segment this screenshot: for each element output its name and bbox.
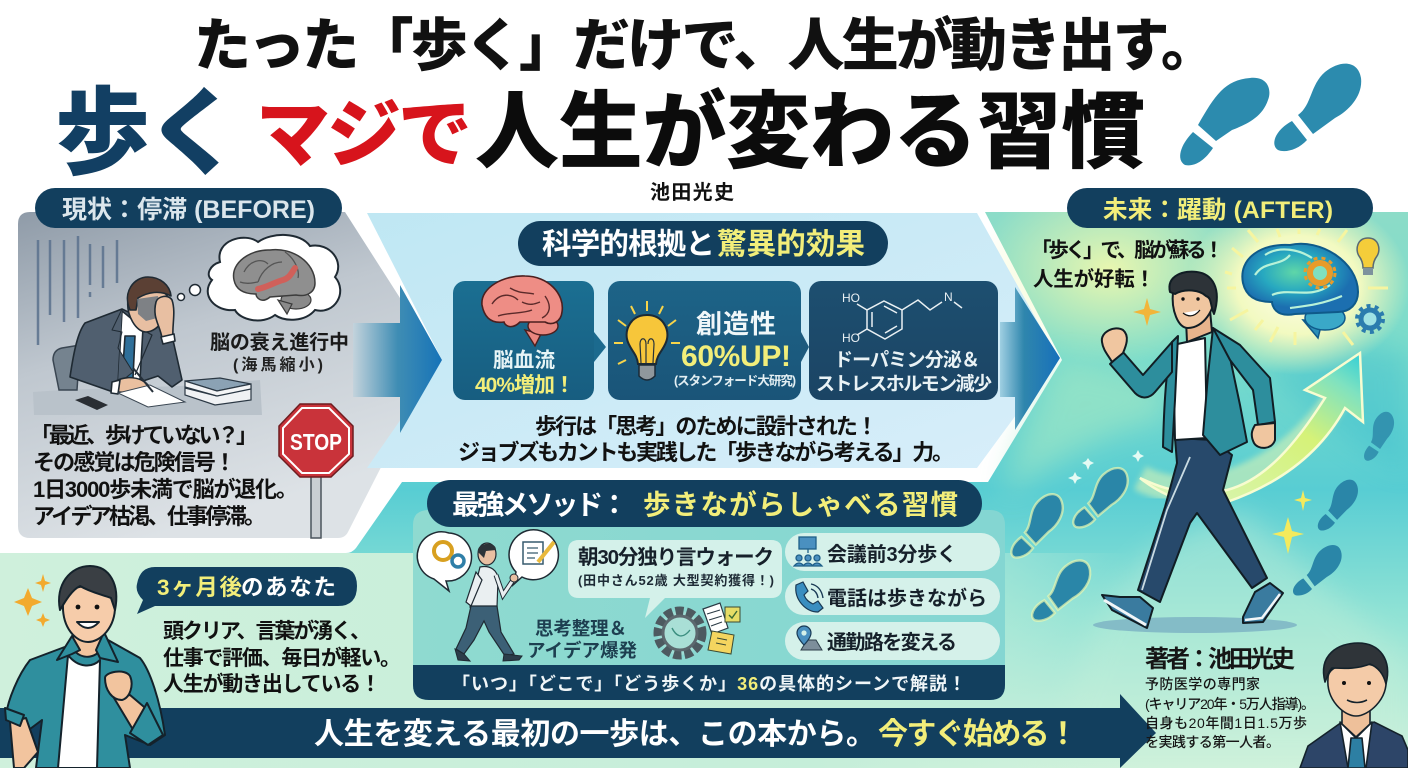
icon: dopamine molecule: HO (842, 331, 860, 345)
raised fist (105, 672, 132, 700)
icon: gray brain with highlighted hippocampus (234, 250, 315, 314)
card: blood flow: 脳血流 (493, 349, 556, 372)
paper (118, 385, 185, 407)
after text block: 「歩く」で、脳が蘇る！ (1031, 238, 1224, 262)
text block: three months later: 頭クリア、言葉が湧く、 (163, 619, 371, 643)
shadow under walker (1093, 617, 1297, 633)
science text block: 歩行は「思考」のために設計された！ (535, 414, 878, 439)
thought bubble (178, 235, 340, 320)
card: dopamine (809, 281, 998, 400)
text: idea explosion: 思考整理＆ (535, 618, 627, 639)
figure: three months later man (5, 566, 165, 768)
text: idea explosion (527, 618, 637, 661)
author block: を実践する第一人者。 (1145, 734, 1280, 750)
callout: morning walk (568, 540, 782, 618)
author block (1145, 646, 1315, 750)
card: dopamine: ドーパミン分泌＆ (834, 349, 980, 371)
before text block (30, 423, 298, 529)
heading: science: 科学的根拠と (542, 228, 715, 261)
card: dopamine: ストレスホルモン減少 (816, 372, 992, 395)
panel: method (413, 510, 1005, 700)
jacket left panel (1163, 336, 1178, 452)
icon: footprints top right (1180, 64, 1361, 165)
heading: method: 歩きながらしゃべる習慣 (643, 489, 958, 520)
icon: gear and documents (658, 603, 740, 655)
card: blood flow (453, 276, 606, 400)
sparkles: orange (14, 574, 51, 627)
callout: 3 months later: 3ヶ月後 (157, 575, 242, 600)
science text block (458, 414, 954, 465)
panel: after background (346, 212, 1408, 768)
icon: glowing brain (1225, 229, 1388, 345)
sparkles: after (1068, 298, 1312, 554)
arm right (1213, 328, 1275, 425)
panel: method: 「いつ」「どこで」「どう歩くか」36の具体的シーンで解説！ (452, 674, 966, 694)
panel: lower left background (0, 553, 1130, 768)
shoes (1102, 595, 1153, 628)
before text block: 「最近、歩けていない？」 (30, 423, 258, 448)
icon: light bulb (614, 301, 680, 380)
figure: author portrait (1300, 643, 1408, 768)
heading: method (427, 480, 982, 527)
heading: method: 最強メソッド： (452, 489, 628, 520)
arrow: science to after (1000, 287, 1060, 430)
science text block: ジョブズもカントも実践した「歩きながら考える」力。 (458, 440, 954, 465)
text block: three months later (163, 619, 401, 696)
label: after pill: 未来：躍動 (AFTER) (1103, 196, 1333, 224)
panel: science chevron (367, 213, 1058, 468)
before text block: 1日3000歩未満で脳が退化。 (33, 477, 298, 502)
text: idea explosion: アイデア爆発 (527, 640, 637, 661)
author block: 著者：池田光史 (1145, 646, 1295, 673)
text block: three months later: 人生が動き出している！ (163, 672, 381, 696)
callout: morning walk: (田中さん52歳 大型契約獲得！) (578, 573, 774, 588)
icon: blue gear (1357, 306, 1383, 332)
callout: morning walk: 朝30分独り言ウォーク (578, 546, 774, 569)
cta arrow: 今すぐ始める！ (878, 718, 1078, 751)
label: before pill: 現状：停滞 (BEFORE) (62, 196, 315, 224)
icon: stop sign (279, 404, 353, 538)
icon: walking person with bubbles (417, 530, 558, 661)
cta arrow (0, 694, 1156, 768)
icon: meeting (794, 537, 822, 566)
trousers (1138, 438, 1267, 602)
desk (33, 380, 262, 415)
title line 2: マジで (256, 93, 472, 176)
chair (53, 345, 80, 390)
phone (75, 396, 108, 410)
icon: map pin and road (797, 626, 822, 650)
title line 2 (55, 81, 1145, 187)
after text block (1031, 238, 1224, 291)
after text block: 人生が好転！ (1033, 267, 1155, 291)
icon: stop sign: STOP (290, 429, 342, 455)
author block: 予防医学の専門家 (1145, 676, 1260, 692)
text block: three months later: 仕事で評価、毎日が軽い。 (163, 646, 401, 670)
footprints: after panel (1005, 410, 1403, 621)
pill: change commute (785, 622, 1000, 660)
author name under title: 池田光史 (650, 181, 734, 204)
brain decline label: 脳の衰え進行中 (210, 331, 349, 354)
fist (1102, 328, 1127, 362)
pill: walk before meeting (785, 533, 1000, 571)
icon: small light bulb (1357, 238, 1379, 275)
jacket right panel (1203, 328, 1247, 455)
callout: 3 months later (137, 567, 357, 614)
pen (133, 368, 153, 392)
title line 2: 歩く (55, 81, 241, 187)
arrow: growth swoosh (1140, 353, 1363, 504)
rain lines (38, 236, 117, 345)
heading: science: 驚異的効果 (717, 228, 865, 261)
label: before pill (35, 188, 342, 228)
brain decline label: (海馬縮小) (233, 355, 323, 374)
author block: (キャリア20年・5万人指導)。 (1145, 696, 1315, 712)
panel: before (18, 212, 400, 538)
books (185, 378, 251, 405)
pill: change commute: 通勤路を変える (827, 631, 957, 654)
sleeve and forearm (114, 695, 150, 733)
pill: walk during phone (785, 578, 1000, 615)
card: creativity (608, 281, 809, 400)
icon: pink brain (482, 276, 562, 346)
icon: phone (796, 582, 823, 612)
depressed man (70, 277, 182, 394)
pill: walk before meeting: 会議前3分歩く (827, 543, 957, 566)
heading: science (518, 221, 888, 266)
title line 2: 人生が変わる習慣 (475, 85, 1145, 179)
before text block: アイデア枯渇、仕事停滞。 (33, 504, 266, 529)
figure: walking man (1102, 272, 1283, 628)
author block: 自身も20年間1日1.5万歩 (1145, 715, 1307, 731)
glow behind brain (1194, 220, 1406, 372)
label: after pill (1067, 188, 1373, 228)
left hand (10, 718, 38, 768)
head (1186, 310, 1212, 342)
arm left (1110, 342, 1172, 397)
card: creativity: 創造性 (696, 309, 776, 339)
arrow: before to science (353, 285, 442, 433)
callout: 3 months later: のあなた (241, 575, 336, 600)
card: blood flow: 40%増加！ (475, 374, 575, 397)
icon: dopamine molecule: HO (842, 291, 860, 305)
icon: dopamine molecule (842, 290, 962, 345)
card: creativity: 60%UP! (681, 340, 791, 373)
shirt (1173, 338, 1207, 440)
icon: dopamine molecule: N (944, 290, 953, 304)
brain decline label (210, 331, 349, 374)
pill: walk during phone: 電話は歩きながら (827, 586, 987, 610)
card: creativity: (スタンフォード大研究) (674, 373, 796, 388)
title line 1: たった「歩く」だけで、人生が動き出す。 (194, 14, 1218, 78)
cta arrow: 人生を変える最初の一歩は、この本から。 (314, 718, 876, 751)
before text block: その感覚は危険信号！ (33, 450, 236, 475)
